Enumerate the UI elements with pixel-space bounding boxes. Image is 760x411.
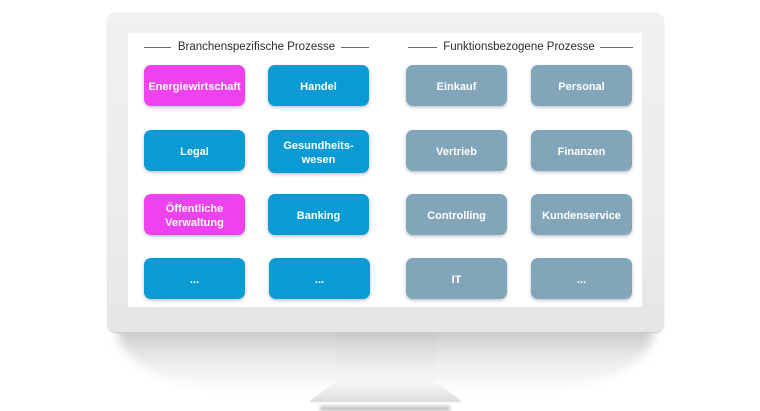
button: more industries 2 [269, 258, 370, 299]
button: more industries 1 [144, 258, 245, 299]
button: Öffentliche Verwaltung [144, 194, 245, 235]
button: Gesundheitswesen: wesen [302, 154, 335, 166]
button: Einkauf [406, 65, 507, 106]
button: Kundenservice [531, 194, 632, 235]
button: Personal [531, 65, 632, 106]
button: IT: IT [452, 274, 461, 286]
monitor body [107, 12, 664, 332]
button: Controlling [406, 194, 507, 235]
button: Controlling: Controlling [427, 210, 486, 222]
button: Vertrieb: Vertrieb [436, 146, 477, 158]
button: more industries 2: ... [315, 274, 324, 286]
button: Legal [144, 130, 245, 171]
button: IT [406, 258, 507, 299]
button: Einkauf: Einkauf [437, 80, 476, 92]
button: Energiewirtschaft: Energiewirtschaft [148, 80, 241, 92]
button: Handel [268, 65, 369, 106]
button: Öffentliche Verwaltung: Verwaltung [165, 216, 224, 228]
button: Gesundheitswesen: Gesundheits- [283, 140, 354, 152]
button: Banking [268, 194, 369, 235]
heading: Branchenspezifische Prozesse: Branchenspezifische Prozesse [178, 41, 335, 53]
button: Vertrieb [406, 130, 507, 171]
button: Finanzen: Finanzen [558, 146, 605, 158]
button: Kundenservice: Kundenservice [542, 210, 621, 222]
button: more functions [531, 258, 632, 299]
button: Banking: Banking [297, 210, 340, 222]
screen [128, 33, 642, 307]
heading: Funktionsbezogene Prozesse: Funktionsbezogene Prozesse [443, 41, 595, 53]
button: Energiewirtschaft [144, 65, 245, 106]
button: Personal: Personal [558, 80, 605, 92]
button: Finanzen [531, 130, 632, 171]
button: Handel: Handel [300, 80, 337, 92]
button: Öffentliche Verwaltung: Öffentliche [166, 202, 223, 214]
button: Legal: Legal [180, 146, 209, 158]
button: more industries 1: ... [190, 274, 199, 286]
button: Gesundheitswesen [268, 130, 369, 173]
button: more functions: ... [577, 274, 586, 286]
